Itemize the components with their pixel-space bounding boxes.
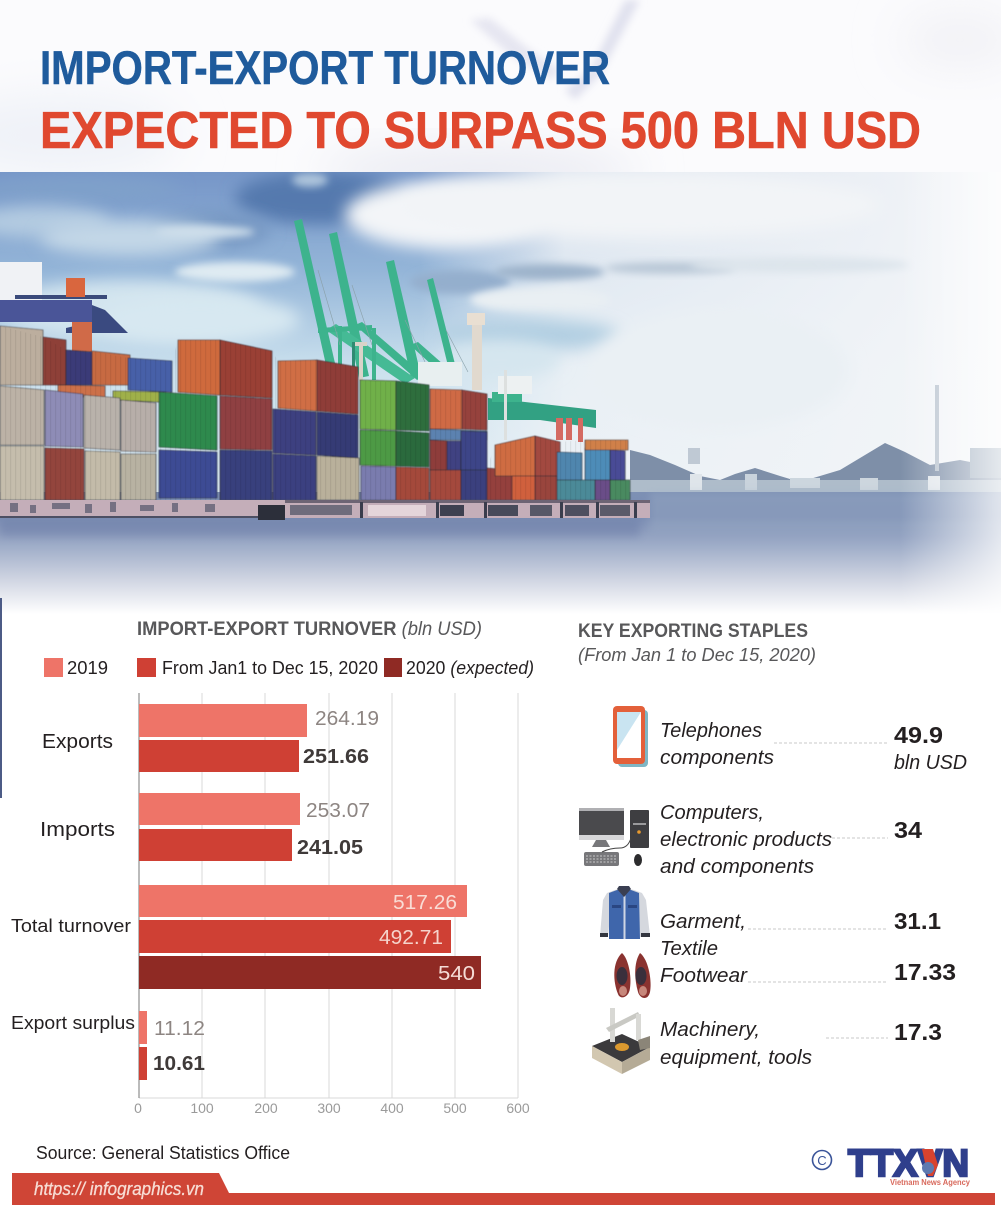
agency logo: TTXVN xyxy=(848,1143,969,1185)
port towers and cabins xyxy=(355,313,532,440)
category labels: Export surplus xyxy=(11,1013,135,1033)
x axis labels: 500 xyxy=(443,1100,467,1116)
legend: 2019: 2019 xyxy=(67,658,108,678)
item: garment: 31.1 xyxy=(894,908,941,934)
staples list xyxy=(579,706,967,1074)
legend: 2019 xyxy=(44,658,108,678)
x axis labels: 0 xyxy=(134,1100,142,1116)
item: telephones xyxy=(660,720,967,774)
sky with clouds xyxy=(0,171,1001,502)
hero photo: container port xyxy=(0,171,1001,622)
item: computers: and components xyxy=(660,856,814,878)
source note: Source: General Statistics Office xyxy=(36,1143,290,1163)
imports bars: 253.07 xyxy=(306,800,370,822)
crane cables xyxy=(318,270,468,372)
category labels: Total turnover xyxy=(11,916,131,936)
item: footwear: Footwear xyxy=(660,965,748,987)
staples heading xyxy=(578,621,816,665)
title line 2: EXPECTED TO SURPASS 500 BLN USD xyxy=(40,102,921,160)
total turnover bars xyxy=(139,885,481,989)
item: garment: Textile xyxy=(660,938,718,960)
category labels xyxy=(11,731,135,1033)
green cranes xyxy=(294,219,596,442)
page edge strip xyxy=(0,598,2,798)
right edge fade xyxy=(900,172,1001,622)
total turnover bars: 492.71 xyxy=(379,927,443,949)
exports bars xyxy=(139,704,379,772)
header background with faint clouds xyxy=(0,0,1001,172)
total turnover bars: 517.26 xyxy=(393,892,457,914)
export surplus bars xyxy=(139,1011,205,1080)
chart heading: IMPORT-EXPORT TURNOVER (bln USD) xyxy=(137,619,482,640)
x axis labels xyxy=(134,1100,530,1116)
distant hills and chimney xyxy=(630,385,1001,494)
item: machinery: Machinery, xyxy=(660,1019,760,1041)
icon: computer xyxy=(579,808,649,866)
staples heading: KEY EXPORTING STAPLES xyxy=(578,621,808,642)
icon: shoes xyxy=(614,953,651,998)
dashed leader lines xyxy=(748,743,888,1038)
item: telephones: bln USD xyxy=(894,752,967,774)
x axis labels: 300 xyxy=(317,1100,341,1116)
bar chart xyxy=(11,693,530,1116)
item: telephones: Telephones xyxy=(660,720,762,742)
item: machinery xyxy=(660,1019,942,1069)
imports bars: 241.05 xyxy=(297,837,363,859)
title line 1: IMPORT-EXPORT TURNOVER xyxy=(40,41,610,94)
x axis labels: 600 xyxy=(506,1100,530,1116)
icon: jacket xyxy=(600,886,650,939)
item: machinery: 17.3 xyxy=(894,1019,942,1045)
container stacks xyxy=(0,326,630,500)
item: computers: electronic products xyxy=(660,829,832,851)
item: machinery: equipment, tools xyxy=(660,1047,812,1069)
website url: https:// infographics.vn xyxy=(34,1179,204,1199)
item: footwear: 17.33 xyxy=(894,959,956,985)
title xyxy=(40,41,921,160)
export surplus bars: 10.61 xyxy=(153,1053,205,1075)
item: telephones: 49.9 xyxy=(894,722,943,748)
item: computers: Computers, xyxy=(660,802,764,824)
legend: 2020 expected: 2020 (expected) xyxy=(406,658,534,678)
footer band xyxy=(12,1173,995,1205)
exports bars: 264.19 xyxy=(315,708,379,730)
x axis labels: 200 xyxy=(254,1100,278,1116)
item: telephones: components xyxy=(660,747,774,769)
x axis labels: 100 xyxy=(190,1100,214,1116)
water xyxy=(0,492,1001,614)
item: footwear xyxy=(660,959,956,987)
container ribbing xyxy=(0,326,630,500)
chart legend xyxy=(44,658,534,678)
item: computers xyxy=(660,802,922,878)
legend: year to date 2020: From Jan1 to Dec 15, 2020 xyxy=(162,658,378,678)
blue gantry crane xyxy=(0,262,128,352)
item: garment: Garment, xyxy=(660,911,746,933)
staples heading: (From Jan 1 to Dec 15, 2020) xyxy=(578,645,816,665)
category labels: Exports xyxy=(42,731,113,753)
category labels: Imports xyxy=(40,819,115,841)
x axis labels: 400 xyxy=(380,1100,404,1116)
exports bars: 251.66 xyxy=(303,746,369,768)
agency logo: Vietnam News Agency xyxy=(890,1178,971,1187)
icon: telephone xyxy=(613,706,648,767)
total turnover bars: 540 xyxy=(438,963,475,985)
item: garment xyxy=(660,908,941,960)
icon: machinery xyxy=(592,1008,650,1074)
export surplus bars: 11.12 xyxy=(154,1018,205,1040)
imports bars xyxy=(139,793,370,861)
quay xyxy=(0,500,650,520)
item: computers: 34 xyxy=(894,817,922,843)
agency logo: C xyxy=(817,1153,827,1168)
